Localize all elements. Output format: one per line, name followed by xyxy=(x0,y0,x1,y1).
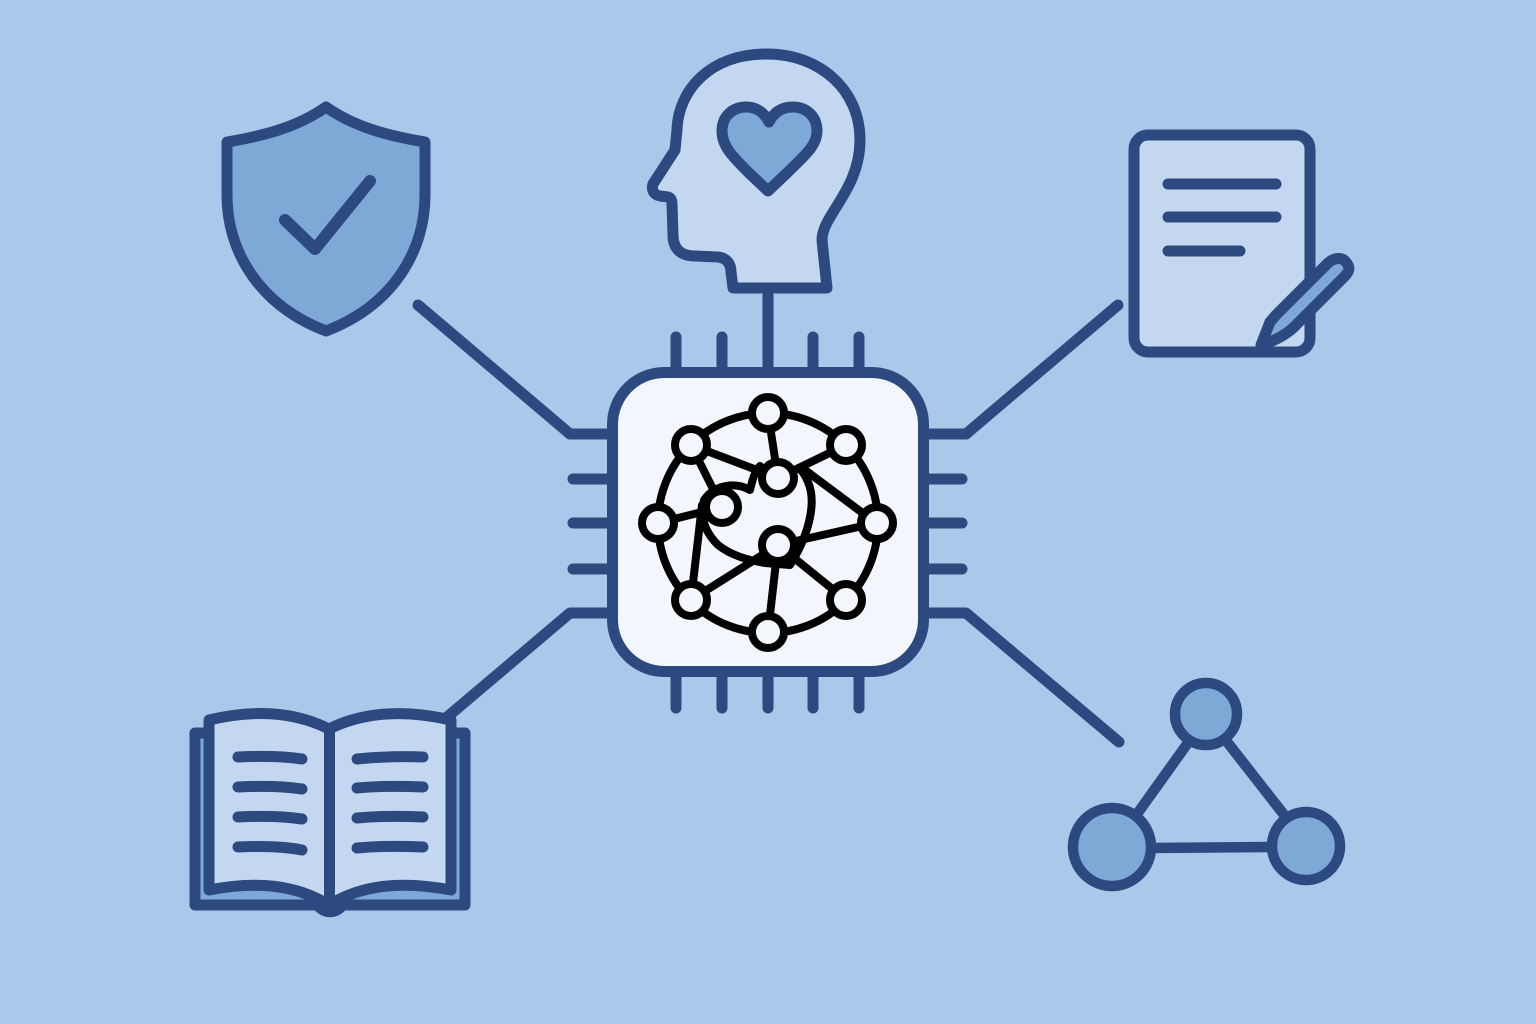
icon: document with pen xyxy=(1134,135,1349,352)
icon: open book xyxy=(195,714,465,913)
connector lines xyxy=(418,290,1119,742)
icon: shield with check xyxy=(227,107,425,331)
icon: head with heart xyxy=(652,54,860,288)
chip pins xyxy=(573,337,962,708)
icon: neural network brain xyxy=(642,397,893,648)
chip body xyxy=(612,372,924,672)
icon: triangle graph of three nodes xyxy=(1073,683,1340,886)
